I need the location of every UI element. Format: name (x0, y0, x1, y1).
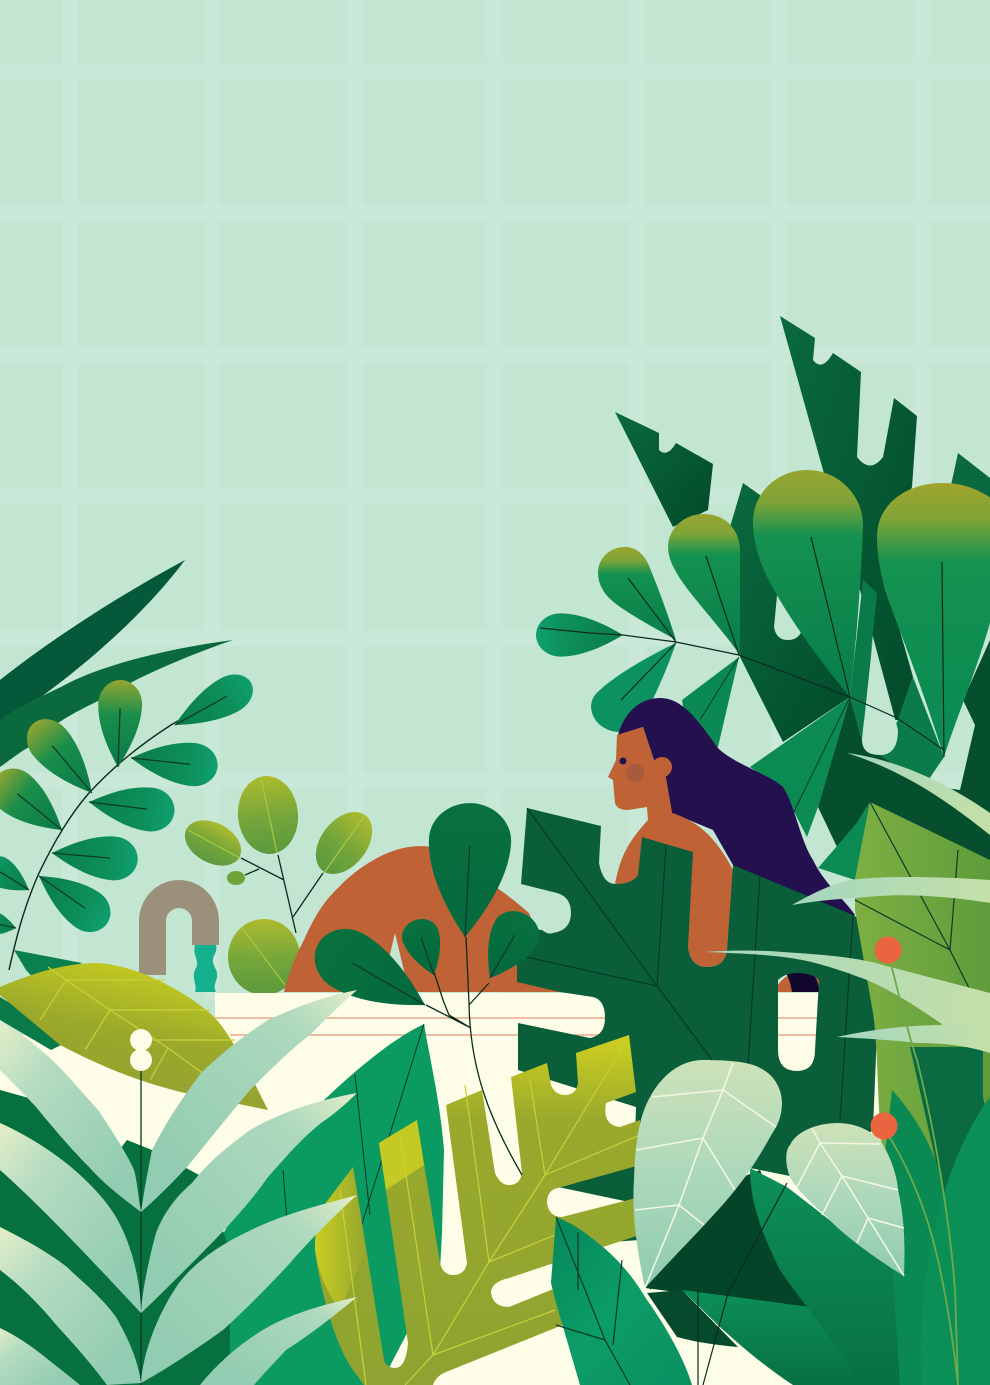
right background spiky dark leaves (615, 316, 990, 880)
olive leaf behind fern (0, 963, 268, 1110)
woman's knee (284, 846, 560, 992)
left fern (0, 990, 357, 1385)
olive monstera leaf (315, 1035, 640, 1385)
long dark blades, left (0, 560, 233, 767)
right dark leaf and pale blades (705, 753, 990, 1385)
berry stems with orange berries (870, 936, 958, 1385)
face and body (608, 727, 733, 967)
eye (620, 758, 626, 764)
fern stem and buds (140, 1065, 142, 1385)
left branch with rounded leaves (0, 667, 260, 985)
green leaf behind monstera (188, 1024, 444, 1385)
right olive-green leaf (855, 802, 990, 1200)
right cluster of round leaves on a stem (536, 470, 990, 757)
large dark puzzle leaf (517, 808, 881, 1290)
pale veined leaves (633, 1060, 904, 1288)
woman in the bath (608, 698, 855, 967)
small centre plant with oval leaves (177, 774, 384, 995)
fern dark backing (0, 1090, 230, 1385)
fern pale leaflets (0, 990, 357, 1385)
hair (618, 698, 855, 950)
tap and running water (139, 880, 219, 992)
cheek (626, 764, 644, 782)
foreground stem plant over the knee (303, 801, 547, 1032)
stem over tub (466, 937, 522, 1175)
bathtub (0, 973, 880, 1385)
bottom-right large green leaves (645, 1090, 990, 1385)
bottom centre green leaf (551, 1217, 692, 1385)
ear (652, 757, 672, 777)
